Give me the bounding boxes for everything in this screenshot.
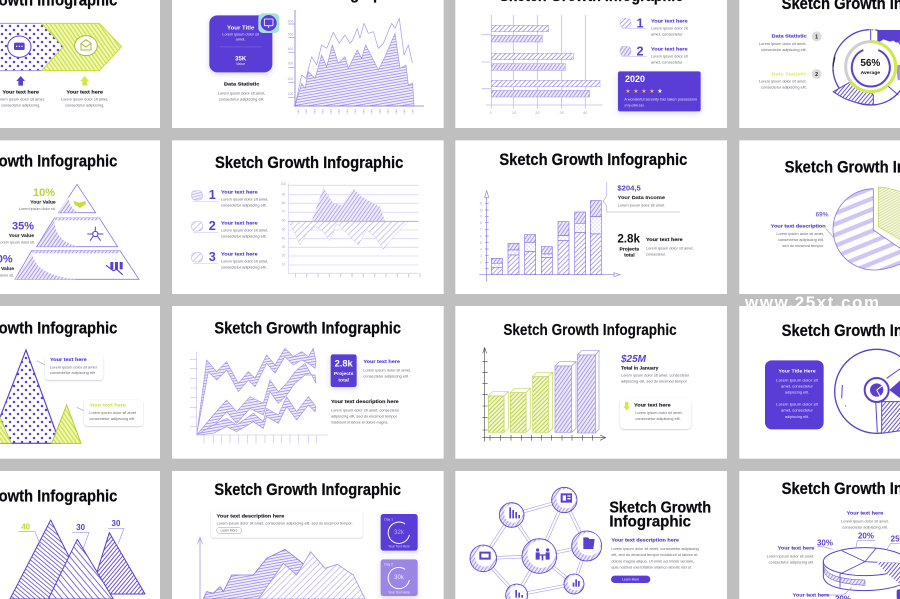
panel: line bands slide [172, 306, 444, 459]
pyramid bottom [15, 251, 139, 279]
donut chart: 56% [860, 58, 880, 69]
data statistic 1 [759, 34, 807, 52]
label 40 [18, 522, 42, 548]
stat: projects total: consectetur. [646, 251, 666, 256]
text block top: Lorem ipsum dolor sit amet, [841, 518, 889, 523]
label 30 middle: 30 [76, 523, 86, 532]
text block left [0, 90, 45, 108]
stacked bar chart: 3 [480, 254, 482, 258]
value 35%: Your Value [9, 233, 34, 239]
percent labels [817, 532, 900, 599]
label 30 right [108, 519, 124, 543]
stacked bar chart [479, 191, 620, 282]
mountain 1 [10, 520, 90, 599]
label 30 middle [73, 523, 89, 548]
description: Lorem ipsum dolor sit amet, consectetur [331, 408, 400, 413]
text block left: Lorem ipsum dolor sit amet, [767, 554, 814, 559]
bar chart: 20 [534, 110, 540, 115]
value 30% [0, 253, 14, 278]
donut chart [833, 29, 900, 105]
legend 2 [192, 219, 268, 238]
stacked bar chart: 8 [480, 221, 482, 225]
text block: consectetur adipiscing elit. [363, 374, 409, 379]
text block: consectetur adipiscing elit. [219, 97, 264, 102]
text block: Lorem ipsum dolor sit amet, [218, 91, 265, 96]
card: projects: total [338, 377, 350, 383]
card: amet, consectetur [781, 383, 813, 388]
text block right [61, 90, 108, 108]
stacked bar chart: 4 [480, 247, 482, 251]
text block: 69% [816, 212, 829, 219]
pie disc [835, 349, 900, 433]
area chart: 10 [282, 262, 286, 266]
card: adipiscing elit. [785, 414, 809, 419]
legend 2: Lorem ipsum dolor sit [651, 54, 689, 59]
panel: network slide [455, 471, 727, 599]
stacked bar chart: 10 [479, 208, 483, 212]
pyramid top [59, 184, 96, 213]
text block top: consectetur adipiscing elit. [842, 524, 888, 529]
stat: $25M: Total in January [621, 365, 659, 370]
description: Your text description here [331, 399, 399, 405]
card: 2020: ★ [625, 88, 631, 95]
text block [363, 359, 411, 379]
bar chart: 10 [512, 110, 517, 115]
description: incididunt ut labore et dolore magna. [331, 420, 388, 425]
value 10%: Lorem ipsum dolor sit. [19, 206, 56, 211]
legend 1 [620, 16, 689, 37]
data statistic 2: Lorem ipsum dolor sit amet, [759, 79, 807, 84]
text block [771, 212, 829, 248]
stat: projects total: total [624, 252, 635, 258]
callout: income: $204,5 [617, 184, 641, 193]
callout 1: consectetur adipiscing elit [50, 370, 96, 375]
stat: $25M: Lorem ipsum dolor sit amet, consectetur [621, 372, 690, 377]
text block top: Your text here [847, 511, 884, 517]
text block top [841, 511, 889, 529]
stat: $25M: adipiscing elit, sed do eiusmod tempor [621, 378, 688, 383]
stat: $25M [620, 354, 690, 383]
callout [620, 398, 691, 429]
area chart: 90 [282, 192, 286, 196]
text block left: Your text here [778, 546, 815, 552]
card: projects: 2.8k [335, 359, 354, 369]
heading [609, 499, 711, 531]
lime arrow [42, 23, 122, 71]
legend 1 [192, 188, 268, 207]
panel: area chart with day cards slide [172, 471, 444, 599]
legend 2 [620, 44, 689, 65]
heading: Sketch Growth [609, 499, 711, 516]
data statistic 1: Data Statistic [772, 34, 807, 40]
callout 2: Lorem ipsum dolor sit amet [89, 410, 137, 415]
legend 1: Your text here [651, 19, 688, 25]
panel: title card and disc slide [739, 306, 900, 459]
callout 2 [77, 400, 143, 426]
dotted arrow [0, 23, 63, 71]
area chart: 100 [288, 92, 293, 96]
pyramid middle [37, 218, 118, 247]
description: Your text description here [611, 537, 679, 543]
panel: three mountains slide [0, 471, 160, 599]
stacked bar chart: 7 [480, 228, 482, 232]
legend 1: Lorem ipsum dolor sit amet, [221, 196, 268, 201]
text block bottom: Your text here [793, 592, 830, 598]
card: day 1: Day 1 [384, 517, 393, 521]
icon: presentation badge [258, 13, 279, 33]
area chart: 100 [281, 182, 286, 186]
area chart: 60 [282, 219, 286, 223]
area chart: 50 [282, 228, 286, 232]
card: Your Title [227, 25, 254, 31]
description: elit, sed do eiusmod tempor incididunt ut labore et [611, 552, 698, 557]
area chart: 500 [288, 32, 293, 36]
stat: $25M: $25M [620, 354, 647, 365]
card: amet, consectetur [781, 408, 813, 413]
panel: arrow process slide [0, 0, 160, 128]
legend 1: Lorem ipsum dolor sit [651, 26, 689, 31]
area chart: 40 [282, 236, 286, 240]
panel: 3D pie slide [739, 471, 900, 599]
heading: Sketch Growth Infographic [503, 322, 677, 339]
callout 1: Lorem ipsum dolor sit amet [50, 364, 98, 369]
3D bar chart [482, 348, 606, 442]
card: amet. [236, 37, 246, 42]
panel: stacked bars slide [455, 140, 727, 294]
description: Lorem ipsum dolor sit amet, consectetur adipiscing [611, 546, 699, 551]
card: 2020: A wonderful serenity has taken possession [624, 96, 697, 101]
donut chart: Average [861, 70, 880, 76]
data statistic 2 [759, 71, 807, 90]
icon: up arrow purple [16, 76, 25, 86]
panel: donut slide [739, 0, 900, 128]
panel: pie slide [739, 140, 900, 294]
stacked bar chart: 2 [480, 261, 482, 265]
badge 2 [812, 69, 822, 79]
network diagram [470, 487, 602, 599]
card: 2020: 2020 [625, 74, 645, 84]
dotted triangle [0, 350, 60, 443]
callout: Learn More [220, 529, 238, 533]
area chart [288, 10, 424, 114]
text block: consectetur adipiscing elit, [778, 237, 824, 242]
stacked bar chart: 6 [480, 234, 482, 238]
band chart [190, 348, 328, 443]
card: adipiscing elit. [785, 389, 809, 394]
area chart: 600 [288, 20, 293, 24]
bar chart: 30 [559, 110, 565, 115]
card: day 1: Your Text Here [388, 545, 410, 549]
percent labels: 30% [817, 538, 833, 547]
legend 2: 2 [209, 219, 216, 233]
description [331, 399, 400, 425]
panel: data statistic area chart slide [172, 0, 444, 128]
area chart: 20 [282, 254, 286, 258]
panel: legend and positive negative area chart slide [172, 140, 444, 294]
stacked bar chart: 5 [480, 241, 482, 245]
legend 2: Lorem ipsum dolor sit amet, [221, 227, 268, 232]
mountain 3 [90, 533, 145, 594]
callout: Your text here [634, 403, 671, 409]
data statistic 2: Data Statistic [772, 71, 807, 77]
text block left: consectetur adipiscing elit. [769, 560, 814, 565]
legend 1: amet, consectetur [651, 32, 683, 37]
button [611, 576, 650, 583]
panel: triangles with callouts slide [0, 306, 160, 459]
stat: projects total: 2.8k [617, 233, 641, 246]
bar chart [482, 15, 603, 115]
area chart: 400 [288, 47, 293, 51]
callout: income: Lorem ipsum dolor sit amet. [618, 203, 665, 208]
value 35% [0, 220, 35, 244]
card: Value [236, 61, 246, 66]
legend 3: Your text here [221, 252, 258, 258]
card: day 2: Day 2 [384, 563, 393, 567]
text block: Data Statistic [224, 82, 260, 88]
callout [211, 511, 363, 538]
description [611, 537, 699, 569]
watermark: www.25xt.com [744, 293, 879, 312]
area chart [197, 537, 365, 599]
card: day 2: Your Text Here [388, 590, 410, 594]
text block right: consectetur adipiscing. [65, 103, 104, 108]
bar chart: 0 [490, 110, 493, 115]
value 35%: 35% [12, 220, 34, 232]
button: Learn More [622, 578, 639, 582]
card: 2020: ★ [657, 88, 663, 95]
card: Lorem ipsum dolor sit [776, 377, 819, 382]
card: 2020: ★ [641, 88, 647, 95]
card: Your Title Here [778, 369, 816, 375]
text block right: Your text here [66, 90, 103, 96]
legend 2: amet, consectetur [651, 60, 683, 65]
callout: consectetur adipiscing elit. [635, 416, 681, 421]
area chart: 30 [282, 245, 286, 249]
card: projects: Projects [334, 371, 354, 377]
card: projects [331, 354, 357, 387]
heading: Sketch Growth Infographic [214, 318, 401, 337]
card: 2020: ★ [633, 88, 639, 95]
area chart: 300 [288, 62, 293, 66]
card: 2020: of my entire soul. [624, 102, 644, 107]
card: 35K [235, 56, 247, 62]
card: Lorem ipsum dolor sit [222, 32, 260, 37]
card [209, 15, 272, 72]
area chart: 200 [288, 77, 293, 81]
text block: Your text here [363, 359, 400, 365]
legend 3 [192, 250, 268, 269]
legend 1: 1 [209, 188, 216, 202]
card: Lorem ipsum dolor sit [776, 402, 819, 407]
percent labels: 20% [858, 532, 874, 541]
card: day 1 [381, 514, 418, 551]
callout: income [603, 182, 680, 212]
card: day 2 [381, 559, 418, 596]
area chart: 70 [282, 210, 286, 214]
icon: chat [8, 36, 31, 57]
value 10% [19, 187, 56, 211]
description: dolore magna aliqua. Ut enim ad minim veniam, [611, 558, 694, 563]
stacked bar chart: 9 [480, 215, 482, 219]
text block: sed do eiusmod tempor. [782, 243, 824, 248]
card: 2020 [618, 71, 701, 111]
heading: Sketch Growth Infographic [499, 150, 687, 169]
label 30 right: 30 [112, 519, 121, 528]
callout: Your text description here [217, 513, 285, 519]
panel: horizontal bars slide [455, 0, 727, 128]
callout 2: consectetur adipiscing elit [89, 416, 135, 421]
legend 2: Your text here [221, 221, 258, 227]
panel: pyramid slide [0, 140, 160, 294]
icon: mail [75, 36, 97, 56]
legend 3: consectetur adipiscing elit. [221, 264, 267, 269]
heading: Sketch Growth Infographic [214, 480, 401, 499]
data statistic 1: consectetur adipiscing elit. [761, 47, 807, 52]
value 10%: 10% [33, 187, 55, 199]
area chart: 80 [282, 201, 286, 205]
legend 2: Your text here [651, 47, 688, 53]
value 10%: Your Value [30, 200, 56, 206]
legend 1: consectetur adipiscing elit. [221, 202, 267, 207]
callout 2: Your text here [89, 403, 126, 409]
data statistic 1: Lorem ipsum dolor sit amet, [759, 41, 807, 46]
label 40: 40 [21, 522, 31, 531]
stat: projects total: Lorem ipsum dolor sit amet, [646, 245, 694, 250]
text block: Your text description [771, 223, 826, 229]
stat: projects total: Projects [619, 246, 639, 252]
legend 1: Your text here [221, 190, 258, 196]
bar chart: 40 [583, 110, 588, 115]
text block: Lorem ipsum dolor sit amet, [363, 368, 411, 373]
badge 1: 1 [815, 34, 818, 40]
legend 1: 1 [636, 16, 644, 30]
card: 2020: ★ [649, 88, 655, 95]
icon tab [897, 589, 900, 599]
text block left: Your text here [2, 90, 39, 96]
lime triangle left [0, 413, 11, 443]
legend 2: 2 [636, 44, 644, 58]
badge 1 [812, 31, 822, 41]
heading: Infographic [609, 514, 691, 531]
legend 3: 3 [209, 250, 216, 264]
stat: projects total [617, 233, 694, 258]
callout: Lorem ipsum dolor sit amet, consectetur adipiscing elit, sed do eiusmod tempor. [217, 520, 353, 525]
text block left: consectetur adipiscing. [1, 103, 40, 108]
card: day 2: 30k [394, 575, 404, 581]
card: day 1: 32k [394, 530, 404, 536]
callout 1 [37, 355, 103, 380]
area chart [281, 182, 420, 277]
callout: income: Your Data Income [618, 195, 665, 201]
text block left [767, 546, 815, 565]
badge 2: 2 [815, 72, 818, 78]
data statistic 2: consectetur adipiscing elit. [761, 85, 807, 90]
icon: up arrow lime [80, 76, 89, 86]
heading: Sketch Growth Infographic [215, 153, 403, 172]
callout 1: Your text here [50, 357, 87, 363]
description: quis nostrud exercitation ullamco laboris nisi ut. [611, 564, 692, 569]
3D pie chart [818, 541, 900, 595]
description: adipiscing elit, sed do eiusmod tempor [331, 414, 398, 419]
legend 2: consectetur adipiscing elit. [221, 233, 267, 238]
stat: projects total: Your text here [646, 237, 683, 243]
mountain 2 [48, 539, 113, 599]
callout: Lorem ipsum dolor sit amet, [635, 410, 683, 415]
legend 3: Lorem ipsum dolor sit amet, [221, 258, 268, 263]
text block right: Lorem ipsum dolor sit amet, [61, 97, 108, 102]
lime triangle right [52, 405, 81, 443]
text block [218, 82, 265, 102]
text block: Lorem ipsum dolor sit amet, [776, 231, 824, 236]
panel: 3D bars slide [455, 306, 727, 459]
pie chart [826, 187, 900, 270]
stacked bar chart: 11 [479, 202, 483, 206]
card [765, 360, 824, 429]
